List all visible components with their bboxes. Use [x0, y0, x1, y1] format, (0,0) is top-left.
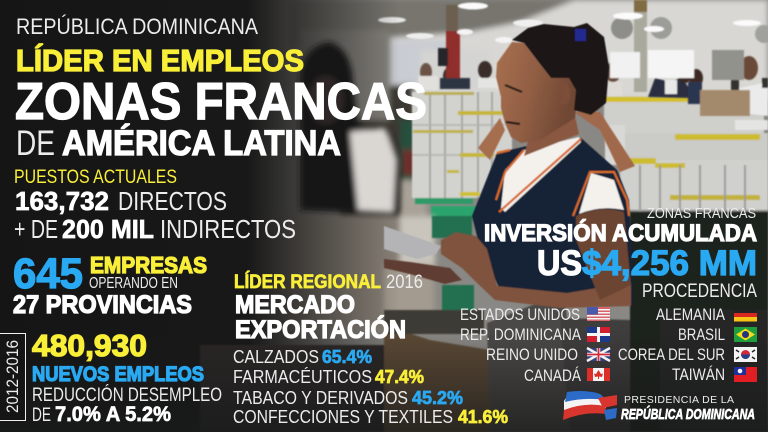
workers in background	[378, 0, 768, 116]
unemployment figures: DE	[32, 405, 51, 426]
footwear	[233, 347, 372, 367]
market heading: EXPORTACIÓN	[235, 314, 406, 344]
unemployment figures: 7.0% A 5.2%	[55, 403, 171, 426]
direct jobs: 163,732	[15, 186, 109, 216]
bottom darkening	[0, 330, 768, 432]
export market block	[233, 271, 508, 427]
investment amount: $4,256 MM	[582, 244, 757, 283]
far arm behind	[574, 112, 635, 172]
new jobs number: 480,930	[32, 328, 147, 363]
vest	[472, 138, 633, 305]
united kingdom: REINO UNIDO	[486, 345, 578, 364]
new jobs label: NUEVOS EMPLEOS	[32, 363, 204, 386]
south korea: COREA DEL SUR	[618, 345, 725, 364]
period tag 2012-2016	[0, 334, 26, 420]
645 number: 645	[13, 250, 83, 298]
foreground boxes	[200, 212, 768, 432]
logo flag	[563, 391, 617, 420]
footwear: CALZADOS	[233, 347, 319, 367]
tobacco: TABACO Y DERIVADOS	[233, 388, 408, 408]
market heading: MERCADO	[235, 291, 355, 319]
stacks of white boxes	[412, 92, 768, 220]
operando en: OPERANDO EN	[89, 275, 178, 292]
market heading	[235, 291, 406, 344]
indirect jobs: INDIRECTOS	[160, 214, 296, 244]
footwear: 65.4%	[322, 347, 372, 367]
dominican republic: REP. DOMINICANA	[460, 325, 582, 344]
taiwan: TAIWÁN	[672, 365, 725, 384]
ceiling and walls	[290, 0, 768, 220]
investment block	[484, 205, 757, 302]
textiles: CONFECCIONES Y TEXTILES	[233, 407, 453, 427]
regional leader: 2016	[386, 272, 423, 293]
investment amount: US	[537, 244, 582, 283]
empresas: EMPRESAS	[90, 252, 207, 278]
indirect jobs: + DE	[14, 214, 58, 244]
background worker on left	[300, 42, 400, 215]
germany: ALEMANIA	[656, 305, 726, 324]
pre-title: REPÚBLICA DOMINICANA	[16, 14, 258, 39]
provinces: 27 PROVINCIAS	[13, 291, 192, 319]
textiles: 41.6%	[458, 407, 508, 427]
title line yellow: LÍDER EN EMPLEOS	[16, 43, 304, 78]
foreground worker	[384, 23, 635, 308]
neck	[524, 112, 579, 156]
brazil: BRASIL	[678, 325, 725, 344]
face	[496, 42, 578, 143]
hair	[512, 23, 609, 115]
shirt	[501, 137, 581, 212]
pharmaceuticals: 47.4%	[375, 367, 424, 387]
logo line one: PRESIDENCIA DE LA	[624, 394, 734, 406]
indirect jobs: 200 MIL	[62, 214, 154, 244]
near arm and hand	[441, 232, 631, 308]
indirect jobs	[14, 214, 296, 244]
unemployment reduction: REDUCCIÓN DESEMPLEO	[32, 384, 222, 406]
direct jobs	[15, 186, 227, 216]
period tag 2012-2016: 2012-2016	[3, 340, 22, 413]
regional leader: LÍDER REGIONAL	[234, 271, 381, 293]
left area: scene fading to dark	[230, 30, 435, 330]
vest trim	[496, 139, 629, 216]
title third line: AMÉRICA LATINA	[62, 123, 341, 163]
jobs heading: PUESTOS ACTUALES	[14, 167, 177, 188]
direct jobs: DIRECTOS	[118, 186, 227, 216]
current jobs block	[14, 167, 296, 244]
new jobs block	[32, 328, 222, 426]
packets	[384, 226, 441, 259]
presidency logo	[563, 391, 755, 423]
title third line: DE	[16, 124, 55, 163]
origin countries right column	[618, 305, 757, 384]
canada: CANADÁ	[524, 366, 582, 385]
companies block	[13, 250, 207, 319]
title main: ZONAS FRANCAS	[15, 73, 427, 131]
origin countries left column	[460, 305, 610, 385]
facial features	[505, 85, 522, 124]
title block	[15, 14, 427, 163]
tobacco: 45.2%	[412, 388, 463, 408]
united states: ESTADOS UNIDOS	[460, 305, 580, 324]
pharmaceuticals: FARMACÉUTICOS	[233, 367, 372, 387]
